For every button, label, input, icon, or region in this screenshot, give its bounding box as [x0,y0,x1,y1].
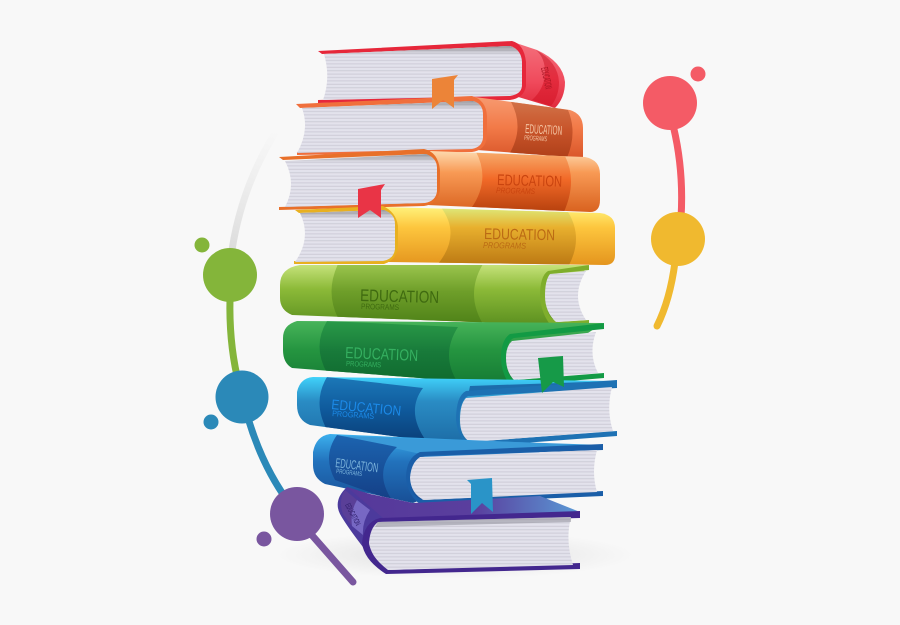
book 4: yellow [294,206,615,267]
blue spine [297,377,617,446]
yellow pages [295,210,395,262]
orange label [496,172,562,196]
connector: green [230,298,237,376]
book 9: purple [338,487,580,574]
infographic: stack of education books [194,41,706,586]
bookmark: green [538,356,564,393]
connector: blue [248,418,287,500]
blue cover [456,380,617,447]
royal blue label [335,455,379,478]
orange label: PROGRAMS [496,186,536,196]
yellow label: EDUCATION [484,226,555,244]
orange label: EDUCATION [497,172,562,191]
book 1: red [318,41,565,108]
royal blue cover [406,444,603,504]
light green label: PROGRAMS [361,302,399,312]
node: small red [690,66,706,82]
book 3: orange [279,149,600,214]
green cover [501,323,604,386]
book 1: red: EDUCATION [538,66,553,90]
blue pages [460,387,613,442]
royal blue label: EDUCATION [335,455,379,475]
book 8: royal blue [313,434,603,504]
light green label [360,286,439,312]
book 5: light green [280,264,589,327]
blue label: EDUCATION [331,396,402,419]
timeline right: red to yellow [657,125,682,326]
orange spine [427,151,600,212]
royal blue label: PROGRAMS [336,468,363,478]
orange band [472,152,571,211]
book 2: orange-red: EDUCATION [525,121,563,138]
royal blue band [329,435,397,500]
bookmark: red [358,184,385,218]
bookmark: blue [467,478,493,514]
node: small blue [204,414,218,430]
connector: yellow [657,262,675,326]
node: large green [203,248,257,302]
green band [320,321,458,383]
green label: EDUCATION [345,345,418,365]
light green cover [540,265,589,327]
bookmark: orange [432,75,458,109]
blue top edge [468,381,617,396]
yellow label: PROGRAMS [483,240,526,251]
book 6: green [283,321,604,386]
node: large yellow [651,212,705,266]
orange-red spine [475,97,583,158]
purple spine label: EDUCATION [343,502,362,527]
royal blue top cover [340,436,603,455]
orange-red label [524,121,563,143]
purple cover [362,511,580,574]
light green label: EDUCATION [360,286,439,307]
node: small purple [256,532,272,546]
blue label: PROGRAMS [332,409,374,421]
orange-red cover [296,96,487,155]
yellow spine [383,207,615,265]
light green spine [280,265,588,325]
blue band [320,377,427,442]
yellow label [483,226,555,251]
green label: PROGRAMS [346,359,381,369]
book 7: blue [297,377,617,447]
timeline left: grey to purple [230,130,353,582]
node: large purple [270,487,324,541]
purple spine [338,487,383,572]
royal blue spine [313,434,560,503]
orange-red pages [297,101,483,153]
green spine [283,321,603,385]
node: large blue [216,370,268,424]
orange-red band [510,102,572,156]
royal blue pages [410,450,597,500]
node: small green [194,238,210,252]
yellow band [438,206,576,267]
orange-red label: PROGRAMS [524,135,547,143]
purple pages [369,517,573,570]
green label [345,345,418,369]
light green band [332,264,483,324]
connector: fading grey [232,130,277,250]
orange pages [285,154,437,207]
red spine [513,42,565,108]
ground shadow [275,531,635,579]
book 2: orange-red [296,96,583,160]
red cover [318,41,526,103]
green pages [506,332,598,380]
node: large red [643,76,697,130]
yellow cover [294,206,398,264]
connector: purple [310,533,353,582]
light green pages [545,271,586,322]
connector: red [673,125,682,218]
red pages [323,46,522,100]
purple top cover [347,487,580,520]
orange cover [279,149,440,210]
